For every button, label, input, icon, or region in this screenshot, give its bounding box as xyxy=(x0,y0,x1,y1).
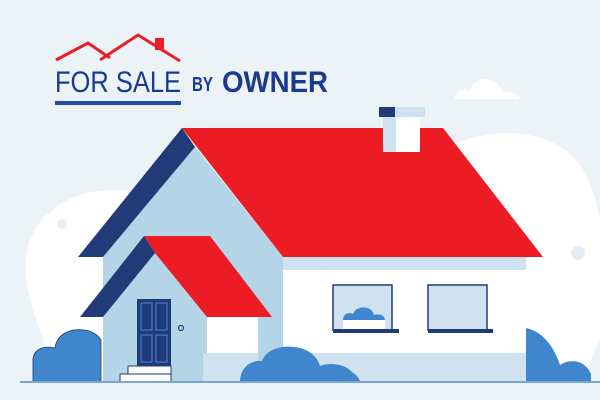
main roof xyxy=(182,128,543,257)
decorative dots xyxy=(57,219,585,260)
porch navy trim xyxy=(80,236,155,317)
gable wall xyxy=(103,147,283,382)
porch wall xyxy=(103,253,258,382)
house xyxy=(78,107,543,382)
logo xyxy=(55,35,328,105)
gable navy trim xyxy=(78,128,195,257)
ground line xyxy=(20,381,600,383)
decorative cloud xyxy=(455,79,520,99)
logo text: FOR SALE xyxy=(55,66,181,99)
logo: BY xyxy=(192,74,213,96)
bush middle xyxy=(240,347,360,382)
window 2 xyxy=(428,285,493,333)
background blob: left xyxy=(25,190,200,382)
logo roof icon xyxy=(56,35,180,61)
steps xyxy=(120,366,171,382)
right wall xyxy=(203,257,534,382)
chimney xyxy=(379,107,425,152)
porch roof xyxy=(144,236,272,317)
background blob: right xyxy=(440,133,600,382)
logo: OWNER xyxy=(222,66,328,99)
window 1 xyxy=(333,285,399,333)
bush left xyxy=(33,330,101,382)
door xyxy=(137,299,184,366)
bush right xyxy=(526,328,591,382)
